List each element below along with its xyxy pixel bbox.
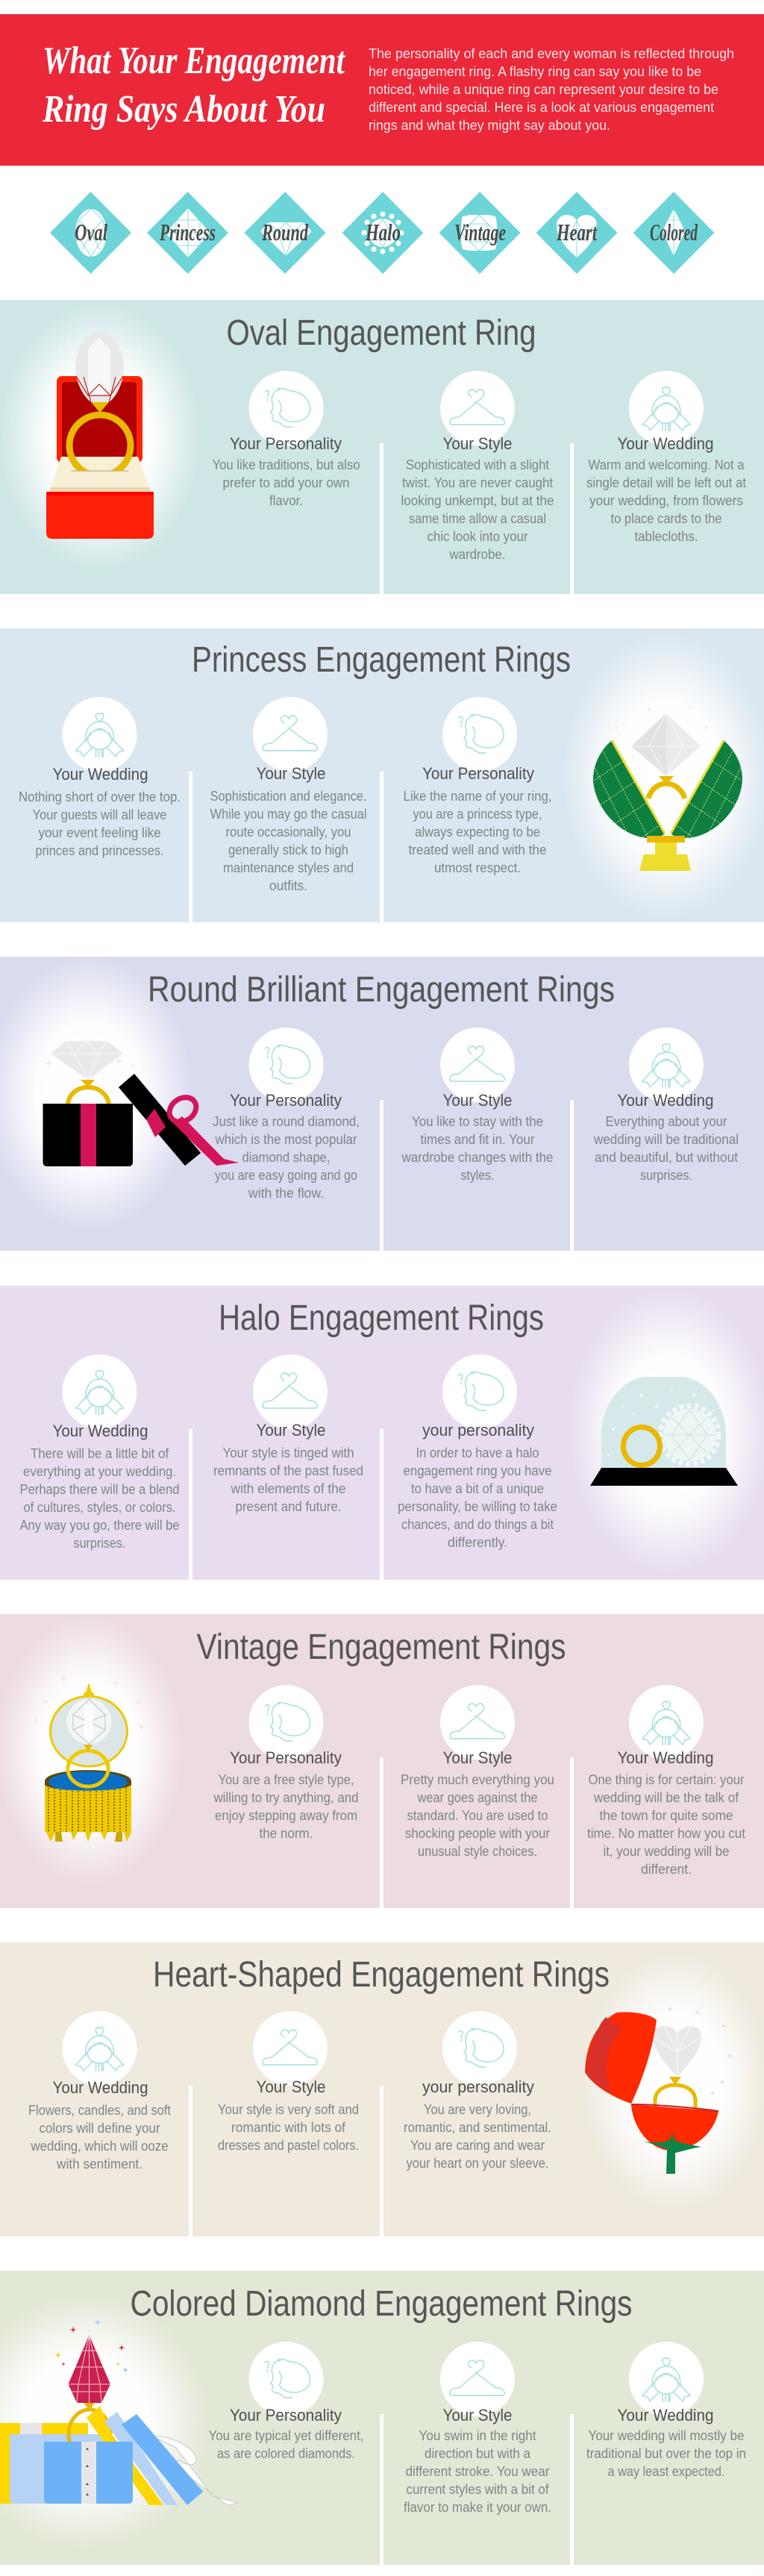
column: wedding: Your Wedding <box>52 2078 148 2097</box>
column: wedding: Warm and welcoming. Not a <box>588 457 745 472</box>
column: wedding <box>28 2011 171 2172</box>
column: style: direction but with a <box>425 2446 531 2461</box>
column: wedding: Your Wedding <box>618 1091 713 1110</box>
column: personality: treated well and with the <box>409 842 546 857</box>
column: wedding <box>19 1354 179 1551</box>
column: wedding: colors will define your <box>39 2121 160 2136</box>
heading: Oval Engagement Ring <box>227 313 536 353</box>
icon: wedding <box>629 2342 704 2416</box>
icon: wedding <box>629 371 704 446</box>
column: wedding <box>586 371 746 544</box>
column: style: Pretty much everything you <box>401 1772 554 1787</box>
column: personality: You are a free style type, <box>218 1772 354 1787</box>
intro text: rings and what they might say about you. <box>369 118 610 133</box>
heading: Round Brilliant Engagement Rings <box>148 970 615 1010</box>
icon: round tile: Round <box>261 219 309 246</box>
column: personality: You are typical yet different, <box>209 2428 364 2443</box>
column: personality: prefer to add your own <box>222 475 349 490</box>
dividers <box>380 443 574 594</box>
intro text: noticed, while a unique ring can represent your desire to be <box>369 82 718 97</box>
title: Ring Says About You <box>42 88 325 131</box>
column: style: route occasionally, you <box>225 825 351 840</box>
column: personality <box>209 2342 364 2461</box>
column: style: Your Style <box>443 434 512 453</box>
column: style: flavor to make it your own. <box>404 2500 551 2515</box>
column: style: generally stick to high <box>228 842 348 857</box>
column: wedding: it, your wedding will be <box>603 1844 730 1859</box>
column: personality: Like the name of your ring, <box>403 789 552 804</box>
column: personality <box>403 697 552 875</box>
column: wedding: of cultures, styles, or colors. <box>24 1500 176 1515</box>
column: wedding <box>587 1685 745 1877</box>
column: personality: diamond shape, <box>242 1150 330 1165</box>
illustration: colored diamond ring in gift boxes <box>0 2295 239 2548</box>
illustration: princess ring in green shell <box>574 651 758 901</box>
column: wedding: Your Wedding <box>618 434 713 453</box>
panel: vintage <box>0 1614 764 1908</box>
icon: personality <box>442 1354 517 1429</box>
heading: Princess Engagement Rings <box>192 640 571 680</box>
heading: Heart-Shaped Engagement Rings <box>153 1955 610 1995</box>
column: wedding: One thing is for certain: your <box>588 1772 745 1787</box>
column: personality: engagement ring you have <box>403 1463 552 1478</box>
column: personality: You like traditions, but also <box>212 457 360 472</box>
icon: style <box>253 2011 328 2086</box>
column: wedding: surprises. <box>73 1536 125 1551</box>
column: style: times and fit in. Your <box>421 1132 534 1147</box>
column: style: standard. You are used to <box>407 1808 548 1823</box>
icon: wedding <box>629 1685 704 1760</box>
icon: personality <box>249 2342 324 2416</box>
column: personality: to have a bit of a unique <box>411 1481 544 1496</box>
column: wedding: time. No matter how you cut <box>587 1826 745 1841</box>
dividers <box>189 2086 383 2236</box>
column: wedding: Everything about your <box>606 1114 727 1129</box>
column: wedding <box>593 1028 739 1183</box>
icon: wedding <box>63 697 137 772</box>
icon: personality <box>249 371 324 446</box>
column: personality: In order to have a halo <box>416 1445 539 1460</box>
icon: oval tile <box>50 192 131 274</box>
column: wedding: Your wedding will mostly be <box>588 2428 745 2443</box>
column: style: present and future. <box>236 1499 342 1514</box>
column: personality <box>404 2011 551 2171</box>
column: personality: you are a princess type, <box>413 807 542 822</box>
column: wedding: and beautiful, but without <box>595 1150 738 1165</box>
column: wedding: a way least expected. <box>607 2464 725 2479</box>
column: personality: differently. <box>448 1535 507 1550</box>
illustration: oval ring in red box <box>8 314 192 559</box>
panel: round <box>0 955 764 1251</box>
icon: princess tile <box>147 192 228 274</box>
column: wedding: to place cards to the <box>610 511 722 526</box>
column: style: wear goes against the <box>417 1790 537 1805</box>
icon: oval tile: Oval <box>75 219 107 246</box>
column: personality: with the flow. <box>248 1186 324 1201</box>
header banner <box>0 14 764 166</box>
column: personality: enjoy stepping away from <box>215 1808 357 1823</box>
column: wedding: Your Wedding <box>618 2406 713 2425</box>
column: personality: romantic, and sentimental. <box>404 2120 551 2135</box>
icon: style <box>440 1685 515 1760</box>
icon: heart tile <box>536 192 618 274</box>
column: style: Your Style <box>443 1748 512 1767</box>
column: wedding: Any way you go, there will be <box>19 1518 179 1533</box>
icon: wedding <box>63 1354 137 1429</box>
column: style: Your style is very soft and <box>218 2102 359 2117</box>
intro text: her engagement ring. A flashy ring can say you like to be <box>369 64 701 79</box>
column: personality: Your Personality <box>230 2406 342 2425</box>
dividers <box>380 2414 574 2565</box>
column: wedding: different. <box>641 1862 692 1877</box>
icon: colored tile <box>633 192 715 274</box>
column: style: wardrobe changes with the <box>401 1150 554 1165</box>
column: wedding: wedding, which will ooze <box>31 2139 168 2154</box>
illustration: heart ring in rose <box>582 1951 764 2213</box>
column: style: romantic with lots of <box>231 2120 346 2135</box>
column: personality: You are caring and wear <box>410 2138 545 2153</box>
column: style: dresses and pastel colors. <box>218 2138 359 2153</box>
column: wedding: Flowers, candles, and soft <box>28 2103 171 2118</box>
icon: style <box>440 371 515 446</box>
column: style: Your Style <box>257 764 325 783</box>
heading: Vintage Engagement Rings <box>197 1628 566 1667</box>
column: personality: your personality <box>422 2078 534 2096</box>
column: personality: Just like a round diamond, <box>213 1114 360 1129</box>
dividers <box>380 1100 574 1251</box>
column: style: Your Style <box>257 1421 325 1439</box>
column: wedding: Your Wedding <box>52 1422 148 1440</box>
column: wedding: everything at your wedding. <box>23 1464 176 1479</box>
column: personality: utmost respect. <box>434 860 521 875</box>
column: wedding: Perhaps there will be a blend <box>19 1482 179 1497</box>
column: personality: Your Personality <box>422 764 534 783</box>
column: wedding: your event feeling like <box>39 825 161 840</box>
column: personality: Your Personality <box>230 1748 342 1767</box>
icon: personality <box>249 1028 324 1102</box>
heading: Colored Diamond Engagement Rings <box>130 2284 633 2324</box>
column: personality: Your Personality <box>230 434 342 453</box>
column: wedding: wedding will be the talk of <box>593 1790 739 1805</box>
icon: wedding <box>63 2011 137 2086</box>
icon: style <box>253 697 328 772</box>
icon: round tile <box>245 192 325 274</box>
column: style: maintenance styles and <box>223 860 354 875</box>
column: wedding <box>586 2342 746 2479</box>
intro text: different and special. Here is a look at various engagement <box>369 100 714 115</box>
icon: vintage tile: Vintage <box>454 219 506 246</box>
column: wedding: the town for quite some <box>600 1808 733 1823</box>
dividers <box>189 772 383 922</box>
icon: heart tile: Heart <box>556 219 598 246</box>
column: personality: your heart on your sleeve. <box>406 2156 549 2171</box>
navigation diamonds <box>50 192 715 274</box>
column: wedding: single detail will be left out at <box>586 475 746 490</box>
title <box>42 40 345 131</box>
column: wedding: traditional but over the top in <box>586 2446 746 2461</box>
column: wedding: princes and princesses. <box>36 843 164 858</box>
column: style: chic look into your <box>427 529 528 544</box>
column: style: styles. <box>461 1168 494 1183</box>
heading: Halo Engagement Rings <box>219 1298 544 1338</box>
column: wedding <box>19 697 181 858</box>
column: personality <box>213 1685 358 1841</box>
column: style: current styles with a bit of <box>406 2482 549 2497</box>
intro text <box>369 46 734 133</box>
icon: style <box>440 1028 515 1102</box>
column: personality <box>398 1354 557 1550</box>
column: wedding: Nothing short of over the top. <box>19 790 181 804</box>
column: wedding: There will be a little bit of <box>31 1446 169 1461</box>
dividers <box>380 1757 574 1908</box>
panel: heart <box>0 1942 764 2236</box>
column: personality <box>213 1028 360 1201</box>
icon: halo tile: Halo <box>365 219 401 246</box>
column: style <box>218 2011 359 2153</box>
column: wedding: your wedding, from flowers <box>589 493 743 508</box>
column: personality: always expecting to be <box>415 825 540 840</box>
title: What Your Engagement <box>43 40 345 82</box>
column: style: You swim in the right <box>419 2428 536 2443</box>
column: personality: personality, be willing to take <box>398 1499 557 1514</box>
panel: oval <box>0 300 764 594</box>
column: wedding: Your guests will all leave <box>33 807 167 822</box>
icon: colored tile: Colored <box>650 219 698 246</box>
icon: personality <box>442 697 517 772</box>
column: personality: the norm. <box>260 1826 313 1841</box>
icon: wedding <box>629 1028 704 1102</box>
column: wedding: Your Wedding <box>618 1748 713 1767</box>
column: personality: your personality <box>422 1421 534 1439</box>
column: wedding: with sentiment. <box>56 2157 143 2172</box>
panel: halo <box>0 1286 764 1580</box>
column: personality: as are colored diamonds. <box>217 2446 355 2461</box>
column: wedding: Your Wedding <box>52 765 148 784</box>
icon: style <box>253 1354 328 1429</box>
column: style: Sophisticated with a slight <box>406 457 549 472</box>
column: style <box>213 1354 363 1514</box>
column: wedding: wedding will be traditional <box>593 1132 739 1147</box>
column: style: While you may go the casual <box>210 807 367 822</box>
column: style: Your style is tinged with <box>222 1445 354 1460</box>
dividers <box>189 1429 383 1580</box>
icon: vintage tile <box>439 192 521 274</box>
column: style: different stroke. You wear <box>406 2464 549 2479</box>
column: style: twist. You are never caught <box>402 475 553 490</box>
column: personality <box>212 371 360 508</box>
column: personality: willing to try anything, and <box>213 1790 358 1805</box>
column: style: with elements of the <box>231 1481 346 1496</box>
column: style: Sophistication and elegance. <box>210 789 367 804</box>
panel: princess <box>0 628 764 922</box>
column: personality: which is the most popular <box>215 1132 357 1147</box>
column: style <box>210 697 367 893</box>
column: wedding: surprises. <box>640 1168 692 1183</box>
column: personality: chances, and do things a bit <box>401 1517 554 1532</box>
column: style: remnants of the past fused <box>213 1463 363 1478</box>
column: style: looking unkempt, but at the <box>401 493 554 508</box>
illustration: halo ring in snow globe <box>569 1289 764 1572</box>
column: personality: you are easy going and go <box>215 1168 357 1183</box>
icon: personality <box>442 2011 517 2086</box>
column: style <box>401 1028 554 1183</box>
column: style: Your Style <box>443 1091 512 1110</box>
illustration: vintage ring in jewel casket <box>0 1616 183 1884</box>
column: personality: Your Personality <box>230 1091 342 1110</box>
column: style: Your Style <box>443 2406 512 2425</box>
column: style <box>401 371 554 562</box>
panel: colored <box>0 2271 764 2565</box>
column: style: shocking people with your <box>405 1826 550 1841</box>
column: style: wardrobe. <box>449 547 506 562</box>
column: style <box>404 2342 551 2515</box>
column: style <box>401 1685 554 1859</box>
column: personality: flavor. <box>269 493 303 508</box>
column: style: unusual style choices. <box>418 1844 537 1859</box>
icon: style <box>440 2342 515 2416</box>
icon: princess tile: Princess <box>159 219 216 246</box>
column: wedding: tablecloths. <box>634 529 698 544</box>
illustration: round ring in black gift box <box>0 955 239 1231</box>
column: style: You like to stay with the <box>412 1114 543 1129</box>
column: personality: You are very loving, <box>424 2102 531 2117</box>
intro text: The personality of each and every woman is reflected through <box>369 46 734 61</box>
column: style: Your Style <box>257 2078 325 2096</box>
icon: personality <box>249 1685 324 1760</box>
column: style: outfits. <box>269 878 307 893</box>
icon: halo tile <box>342 192 424 274</box>
column: style: same time allow a casual <box>409 511 546 526</box>
